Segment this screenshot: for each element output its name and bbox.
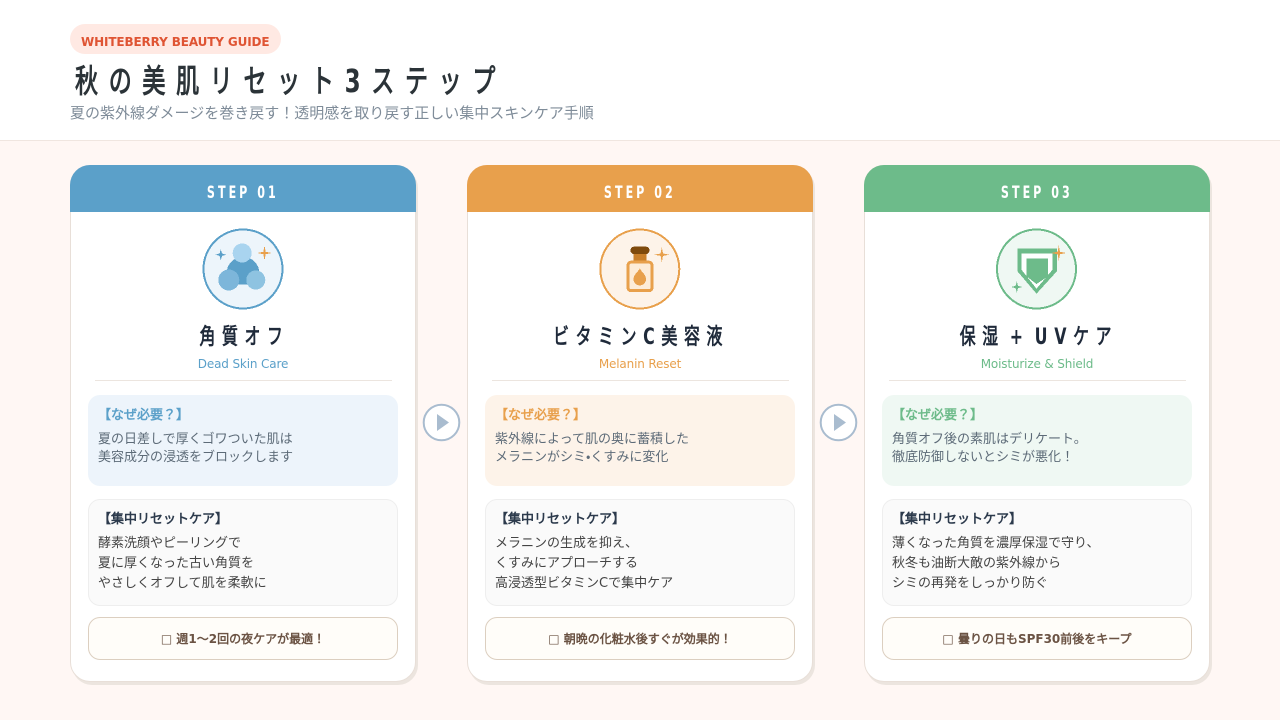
tip: □ 曇りの日もSPF30前後をキープ bbox=[942, 632, 1132, 646]
step 02 english name: Melanin Reset bbox=[599, 357, 681, 371]
step 03 name: 保湿 + UVケア bbox=[959, 325, 1118, 350]
badge: brand guide: WHITEBERRY BEAUTY GUIDE bbox=[81, 35, 269, 49]
icon: shield bbox=[996, 228, 1077, 310]
why heading: 【なぜ必要？】 bbox=[495, 408, 586, 423]
care text: 酵素洗顔やピーリングで bbox=[98, 536, 241, 551]
why text: 夏の日差しで厚くゴワついた肌は bbox=[98, 432, 293, 447]
care heading: 【集中リセットケア】 bbox=[495, 512, 625, 527]
why text: メラニンがシミ・くすみに変化 bbox=[495, 450, 668, 465]
title: 秋の美肌リセット3ステップ bbox=[75, 62, 506, 100]
panel: step 02 bbox=[467, 165, 813, 682]
why box bbox=[88, 395, 398, 486]
step 01 name: 角質オフ bbox=[199, 325, 289, 350]
care box bbox=[88, 499, 398, 606]
care box bbox=[485, 499, 795, 606]
why text: 徹底防御しないとシミが悪化！ bbox=[892, 450, 1074, 465]
header band bbox=[0, 0, 1280, 141]
step 01 english name: Dead Skin Care bbox=[198, 357, 288, 371]
step 03 english name: Moisturize & Shield bbox=[981, 357, 1093, 371]
care text: 秋冬も油断大敵の紫外線から bbox=[892, 556, 1061, 571]
step 03 header: STEP 03 bbox=[1001, 183, 1073, 203]
care text: やさしくオフして肌を柔軟に bbox=[98, 576, 267, 591]
care text: くすみにアプローチする bbox=[495, 556, 638, 571]
step 03 header bbox=[864, 165, 1210, 212]
why text bbox=[495, 432, 689, 465]
care text: 高浸透型ビタミンCで集中ケア bbox=[495, 576, 673, 591]
care text bbox=[98, 536, 267, 591]
care text: 夏に厚くなった古い角質を bbox=[98, 556, 254, 571]
tip bbox=[882, 617, 1192, 660]
care box bbox=[882, 499, 1192, 606]
why box bbox=[882, 395, 1192, 486]
panel: step 01 bbox=[70, 165, 416, 682]
why text: 角質オフ後の素肌はデリケート。 bbox=[892, 432, 1087, 447]
step 02 name: ビタミンC美容液 bbox=[554, 325, 729, 350]
why text: 美容成分の浸透をブロックします bbox=[98, 450, 293, 465]
why text: 紫外線によって肌の奥に蓄積した bbox=[495, 432, 689, 447]
step 01 header: STEP 01 bbox=[207, 183, 279, 203]
step 01 header bbox=[70, 165, 416, 212]
care text: シミの再発をしっかり防ぐ bbox=[892, 576, 1048, 591]
why heading: 【なぜ必要？】 bbox=[892, 408, 983, 423]
why text bbox=[98, 432, 293, 465]
why heading: 【なぜ必要？】 bbox=[98, 408, 189, 423]
tip: □ 朝晩の化粧水後すぐが効果的！ bbox=[548, 632, 732, 646]
why box bbox=[485, 395, 795, 486]
arrow: step 1 to 2 bbox=[422, 404, 460, 442]
tip bbox=[485, 617, 795, 660]
subtitle: 夏の紫外線ダメージを巻き戻す！透明感を取り戻す正しい集中スキンケア手順 bbox=[70, 104, 594, 122]
step 02 header: STEP 02 bbox=[604, 183, 676, 203]
care heading: 【集中リセットケア】 bbox=[98, 512, 228, 527]
icon: serum bottle bbox=[600, 228, 680, 310]
care text: メラニンの生成を抑え、 bbox=[495, 536, 638, 551]
icon: cleansing foam bbox=[202, 228, 284, 310]
badge: brand guide bbox=[70, 24, 281, 54]
care text bbox=[892, 536, 1099, 591]
care text: 薄くなった角質を濃厚保湿で守り、 bbox=[892, 536, 1099, 551]
tip bbox=[88, 617, 398, 660]
arrow: step 2 to 3 bbox=[820, 404, 858, 442]
panel: step 03 bbox=[864, 165, 1210, 682]
care heading: 【集中リセットケア】 bbox=[892, 512, 1022, 527]
step 02 header bbox=[467, 165, 813, 212]
tip: □ 週1〜2回の夜ケアが最適！ bbox=[161, 632, 325, 646]
why text bbox=[892, 432, 1087, 465]
care text bbox=[495, 536, 673, 591]
